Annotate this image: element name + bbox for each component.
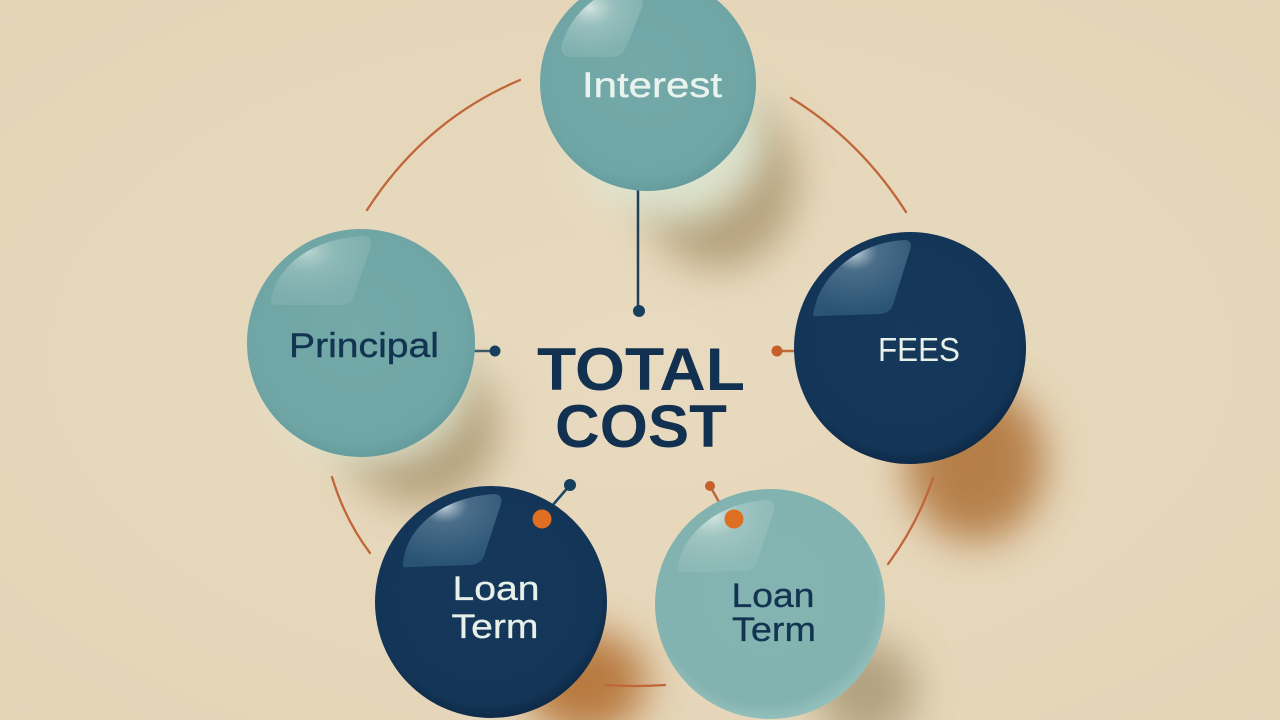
connector: loan term teal to center [705, 481, 719, 502]
node: fees: FEES [878, 331, 960, 368]
node: loan term navy [375, 486, 607, 718]
shadow: interest [578, 47, 796, 268]
marker: orange dot [532, 510, 552, 528]
label: loan term [452, 570, 540, 646]
connector: loan term navy to center [552, 479, 576, 506]
shadow: loan term navy [523, 630, 647, 720]
label: loan term: Term [452, 608, 538, 646]
connector: fees to center [772, 346, 797, 356]
center title: COST [555, 393, 727, 460]
label: loan term: Loan [732, 577, 814, 615]
label: loan term: Loan [452, 570, 540, 608]
node: fees [794, 232, 1026, 464]
node: loan term teal [655, 489, 885, 719]
connecting arcs [332, 80, 933, 686]
label: loan term: Term [732, 611, 816, 649]
shadow: loan term teal [816, 640, 916, 720]
shadow: principal [279, 296, 498, 504]
connector: interest to center [633, 188, 645, 317]
center title [537, 336, 745, 460]
node: principal [247, 229, 475, 457]
node: principal: Principal [289, 327, 439, 365]
shadow: fees [905, 382, 1045, 542]
center title: TOTAL [537, 336, 745, 403]
connector: principal to center [472, 346, 500, 356]
node: interest [540, 0, 756, 191]
label: loan term [732, 577, 816, 649]
node: interest: Interest [582, 66, 722, 105]
marker: orange dot [724, 510, 744, 528]
